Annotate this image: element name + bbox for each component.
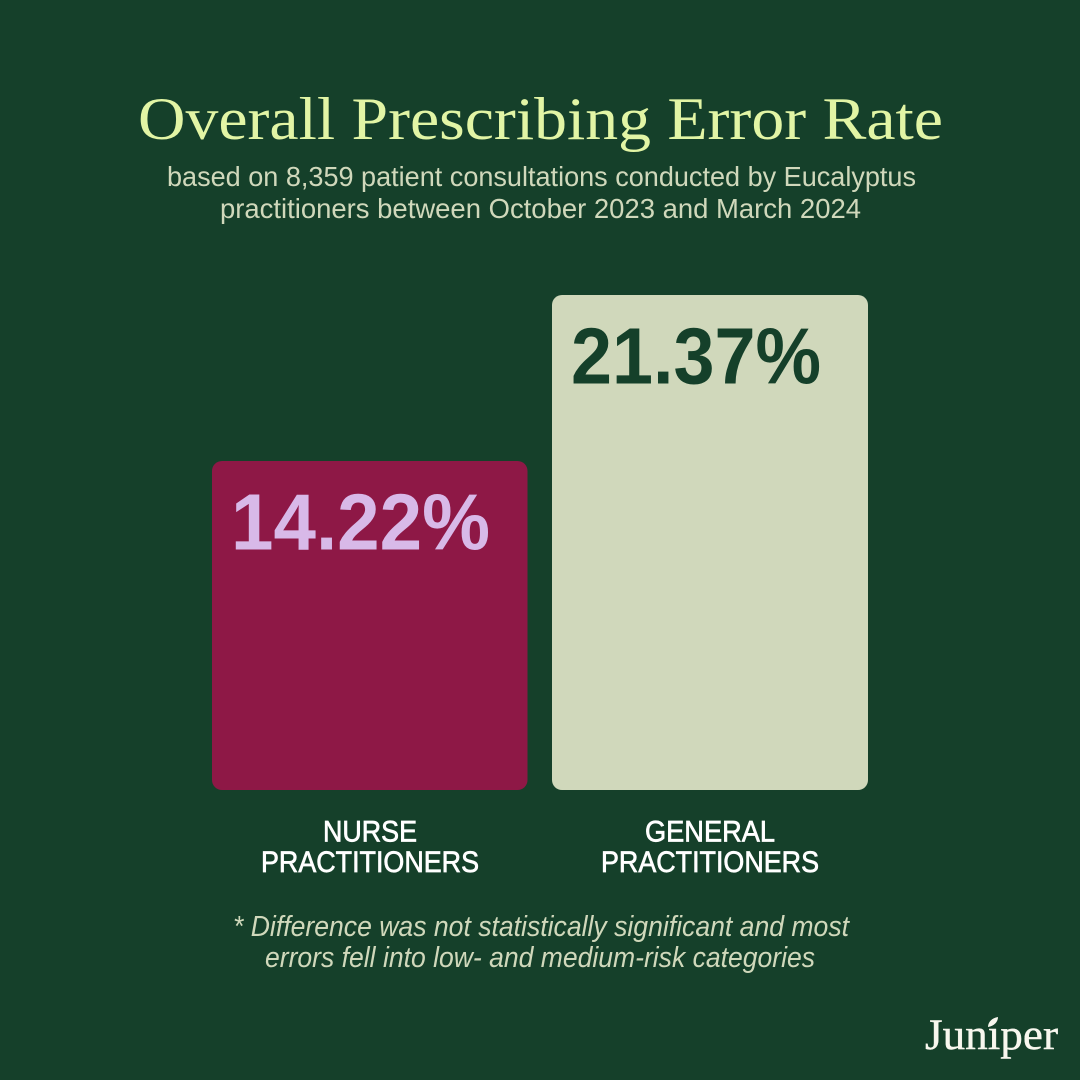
- label: general practitioners: PRACTITIONERS: [601, 846, 819, 879]
- bar chart: [212, 295, 868, 879]
- subtitle: [167, 161, 916, 224]
- icon: leaf: [988, 1017, 998, 1027]
- subtitle: based on 8,359 patient consultations conducted by Eucalyptus: [167, 161, 916, 192]
- bar: nurse practitioners: 14.22%: [231, 478, 490, 566]
- logo: Juniper: Junıper: [925, 1012, 1058, 1059]
- title: Overall Prescribing Error Rate: [138, 86, 943, 152]
- bar: general practitioners: 21.37%: [571, 312, 821, 400]
- label: general practitioners: [601, 816, 819, 879]
- label: general practitioners: GENERAL: [645, 816, 775, 848]
- bar: nurse practitioners: [212, 461, 528, 790]
- footnote: [233, 911, 851, 974]
- label: nurse practitioners: [261, 816, 479, 879]
- bar: general practitioners: [552, 295, 868, 790]
- footnote: * Difference was not statistically significant and most: [233, 911, 851, 943]
- subtitle: practitioners between October 2023 and March 2024: [220, 193, 861, 224]
- footnote: errors fell into low- and medium-risk categories: [265, 942, 815, 974]
- label: nurse practitioners: NURSE: [323, 816, 417, 848]
- label: nurse practitioners: PRACTITIONERS: [261, 846, 479, 879]
